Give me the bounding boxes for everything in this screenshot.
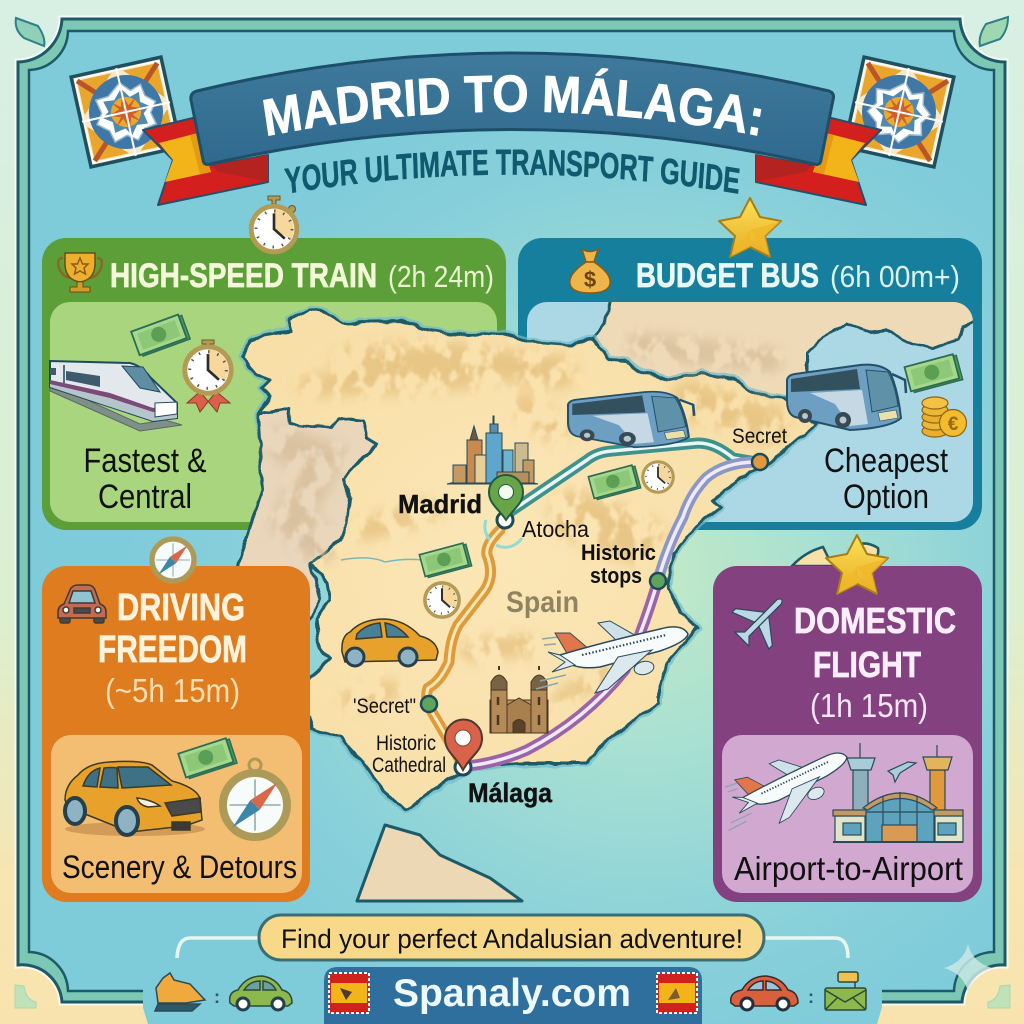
map: mountain texture (296, 331, 788, 712)
map: Spain and Portugal (237, 310, 817, 810)
footer backing tab (143, 984, 882, 1024)
text: scenery and detours: Scenery & Detours (62, 849, 297, 885)
text: cheapest option: Cheapest (824, 442, 948, 480)
icon: front car (58, 585, 106, 623)
icon: plane on map (536, 621, 688, 693)
icon: bus on map (568, 392, 694, 447)
icon: star domestic flight (826, 535, 888, 594)
bracket right (765, 938, 848, 958)
decorative tile left (71, 57, 181, 167)
icon: large compass (223, 759, 287, 837)
heading: high-speed train: (2h 24m) (388, 259, 494, 294)
text: cheapest option: Option (843, 478, 929, 516)
icon: plane top view (724, 581, 800, 657)
icon: banknote west (419, 542, 472, 578)
icon: star budget bus (719, 198, 781, 257)
icon: stopwatch (251, 196, 297, 252)
icon: banknote east (588, 464, 641, 500)
callout pill (259, 915, 764, 960)
map label: Historic stops (581, 540, 656, 588)
corner ornament bottom-left (15, 985, 36, 1008)
icon: red car (731, 976, 798, 1010)
heading: budget bus: (6h 00m+) (830, 259, 960, 294)
icon: banknote driving panel (178, 737, 237, 779)
heading: domestic flight (794, 600, 956, 724)
icon: banknote train panel (131, 314, 190, 357)
heading: driving freedom: (~5h 15m) (105, 672, 240, 709)
heading: driving freedom: DRIVING (117, 587, 245, 629)
heading: budget bus (636, 257, 960, 295)
icon: clock east (643, 462, 673, 492)
footer colon left: : (214, 987, 220, 1007)
map: Portugal and France texture (259, 330, 784, 568)
icon: medal clock (185, 340, 231, 412)
map label: Historic stops: Historic (581, 540, 656, 565)
Madrid ring (485, 520, 522, 547)
brand name: Spanaly.com (393, 972, 631, 1015)
map: North Africa (357, 825, 522, 901)
map label: Malaga: Málaga (468, 778, 553, 808)
stamp right (657, 973, 697, 1013)
icon: envelope with sign (825, 972, 866, 1010)
heading: high-speed train: HIGH-SPEED TRAIN (110, 257, 377, 295)
icon: train (50, 361, 182, 431)
map: Balearic island (792, 543, 878, 566)
text: fastest and central (84, 442, 207, 516)
heading: driving freedom (98, 587, 247, 709)
panel: driving freedom (42, 566, 310, 902)
map label: Historic Cathedral: Historic (376, 732, 436, 755)
icon: compass badge (152, 539, 194, 581)
flag ribbon right (756, 117, 881, 205)
map label: Historic Cathedral (372, 732, 446, 777)
icon: banknote bus panel (905, 353, 963, 393)
decorative tile right (844, 57, 954, 167)
panel: high-speed train (42, 238, 506, 530)
icon: Madrid pin (489, 475, 523, 528)
stop marker: Secret west (421, 696, 437, 712)
text: cheapest option (824, 442, 948, 516)
icon: plane in panel (717, 746, 857, 834)
footer colon right: : (808, 987, 814, 1007)
icon: money bag: $ (584, 267, 596, 292)
icon: bus in panel (787, 365, 906, 430)
route: driving (427, 530, 500, 765)
text: fastest and central: Fastest & (84, 442, 207, 480)
map label: Madrid: Madrid (398, 489, 482, 519)
icon: orange car (65, 761, 205, 836)
panel: budget bus (518, 238, 982, 530)
heading: driving freedom: FREEDOM (98, 629, 247, 671)
footer brand bar (324, 967, 702, 1024)
icon: cathedral (490, 666, 548, 733)
icon: sled (155, 973, 205, 1011)
heading: domestic flight: DOMESTIC (794, 600, 956, 641)
heading: domestic flight: FLIGHT (813, 644, 921, 685)
icon: car on map (342, 619, 438, 666)
icon: euro coins (922, 397, 966, 437)
corner leaf top-left (16, 18, 44, 46)
sparkle (944, 944, 992, 992)
icon: trophy (58, 253, 102, 292)
corner leaf top-right (980, 17, 1008, 46)
map label: Secret west: 'Secret" (353, 695, 416, 718)
stop marker: Secret east (752, 454, 768, 470)
corner ornament bottom-right (988, 985, 1010, 1008)
title banner (189, 52, 835, 166)
icon: euro coins: € (948, 414, 959, 435)
map label: Historic stops: stops (590, 563, 642, 588)
icon: money bag (570, 249, 610, 293)
flag ribbon left (143, 117, 268, 205)
map label: Spain: Spain (506, 586, 579, 619)
map label: Secret east: Secret (732, 425, 787, 448)
map: France (592, 295, 978, 397)
icon: city skyline (447, 416, 538, 484)
stamp left (329, 973, 369, 1013)
subtitle: YOUR ULTIMATE TRANSPORT GUIDE (284, 150, 740, 194)
panel: domestic flight (713, 566, 982, 902)
map label: Atocha: Atocha (522, 516, 589, 542)
icon: Malaga pin (445, 720, 482, 775)
stop marker: historic stops (650, 573, 666, 589)
route: flight (468, 462, 757, 766)
bracket left (177, 938, 258, 958)
text: fastest and central: Central (98, 478, 192, 516)
title: MADRID TO MÁLAGA: (263, 68, 762, 136)
icon: clock west (425, 583, 459, 617)
heading: domestic flight: (1h 15m) (810, 687, 928, 724)
heading: budget bus: BUDGET BUS (636, 257, 819, 295)
map: river (341, 558, 422, 562)
route: budget bus (507, 443, 757, 514)
callout pill: Find your perfect Andalusian adventure! (281, 924, 743, 954)
icon: green car (230, 976, 292, 1010)
icon: airport (833, 743, 963, 842)
map label: Historic Cathedral: Cathedral (372, 754, 446, 777)
text: airport to airport: Airport-to-Airport (734, 850, 963, 887)
